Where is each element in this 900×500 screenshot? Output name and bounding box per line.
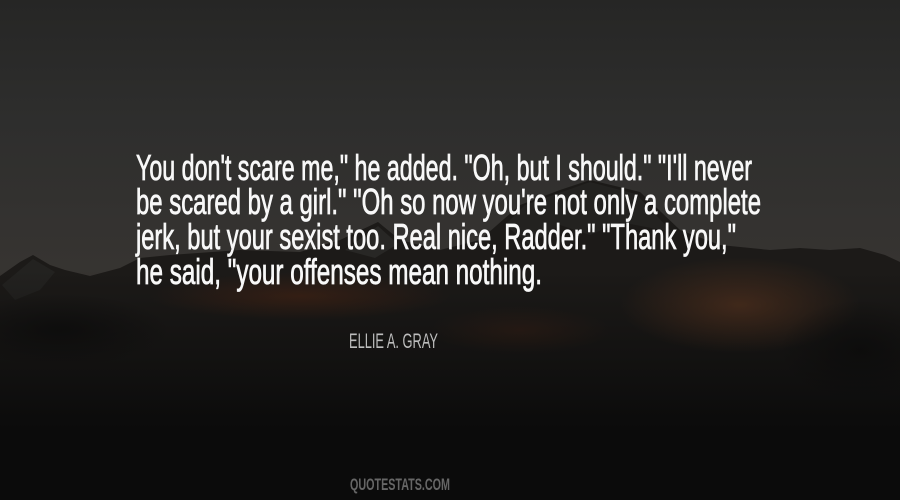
site credit: QUOTESTATS.COM [350, 475, 450, 494]
author name: ELLIE A. GRAY [349, 330, 438, 353]
quote text [135, 147, 761, 292]
background: mountain range [0, 180, 900, 500]
quote text: he said, "your offenses mean nothing. [136, 251, 542, 292]
